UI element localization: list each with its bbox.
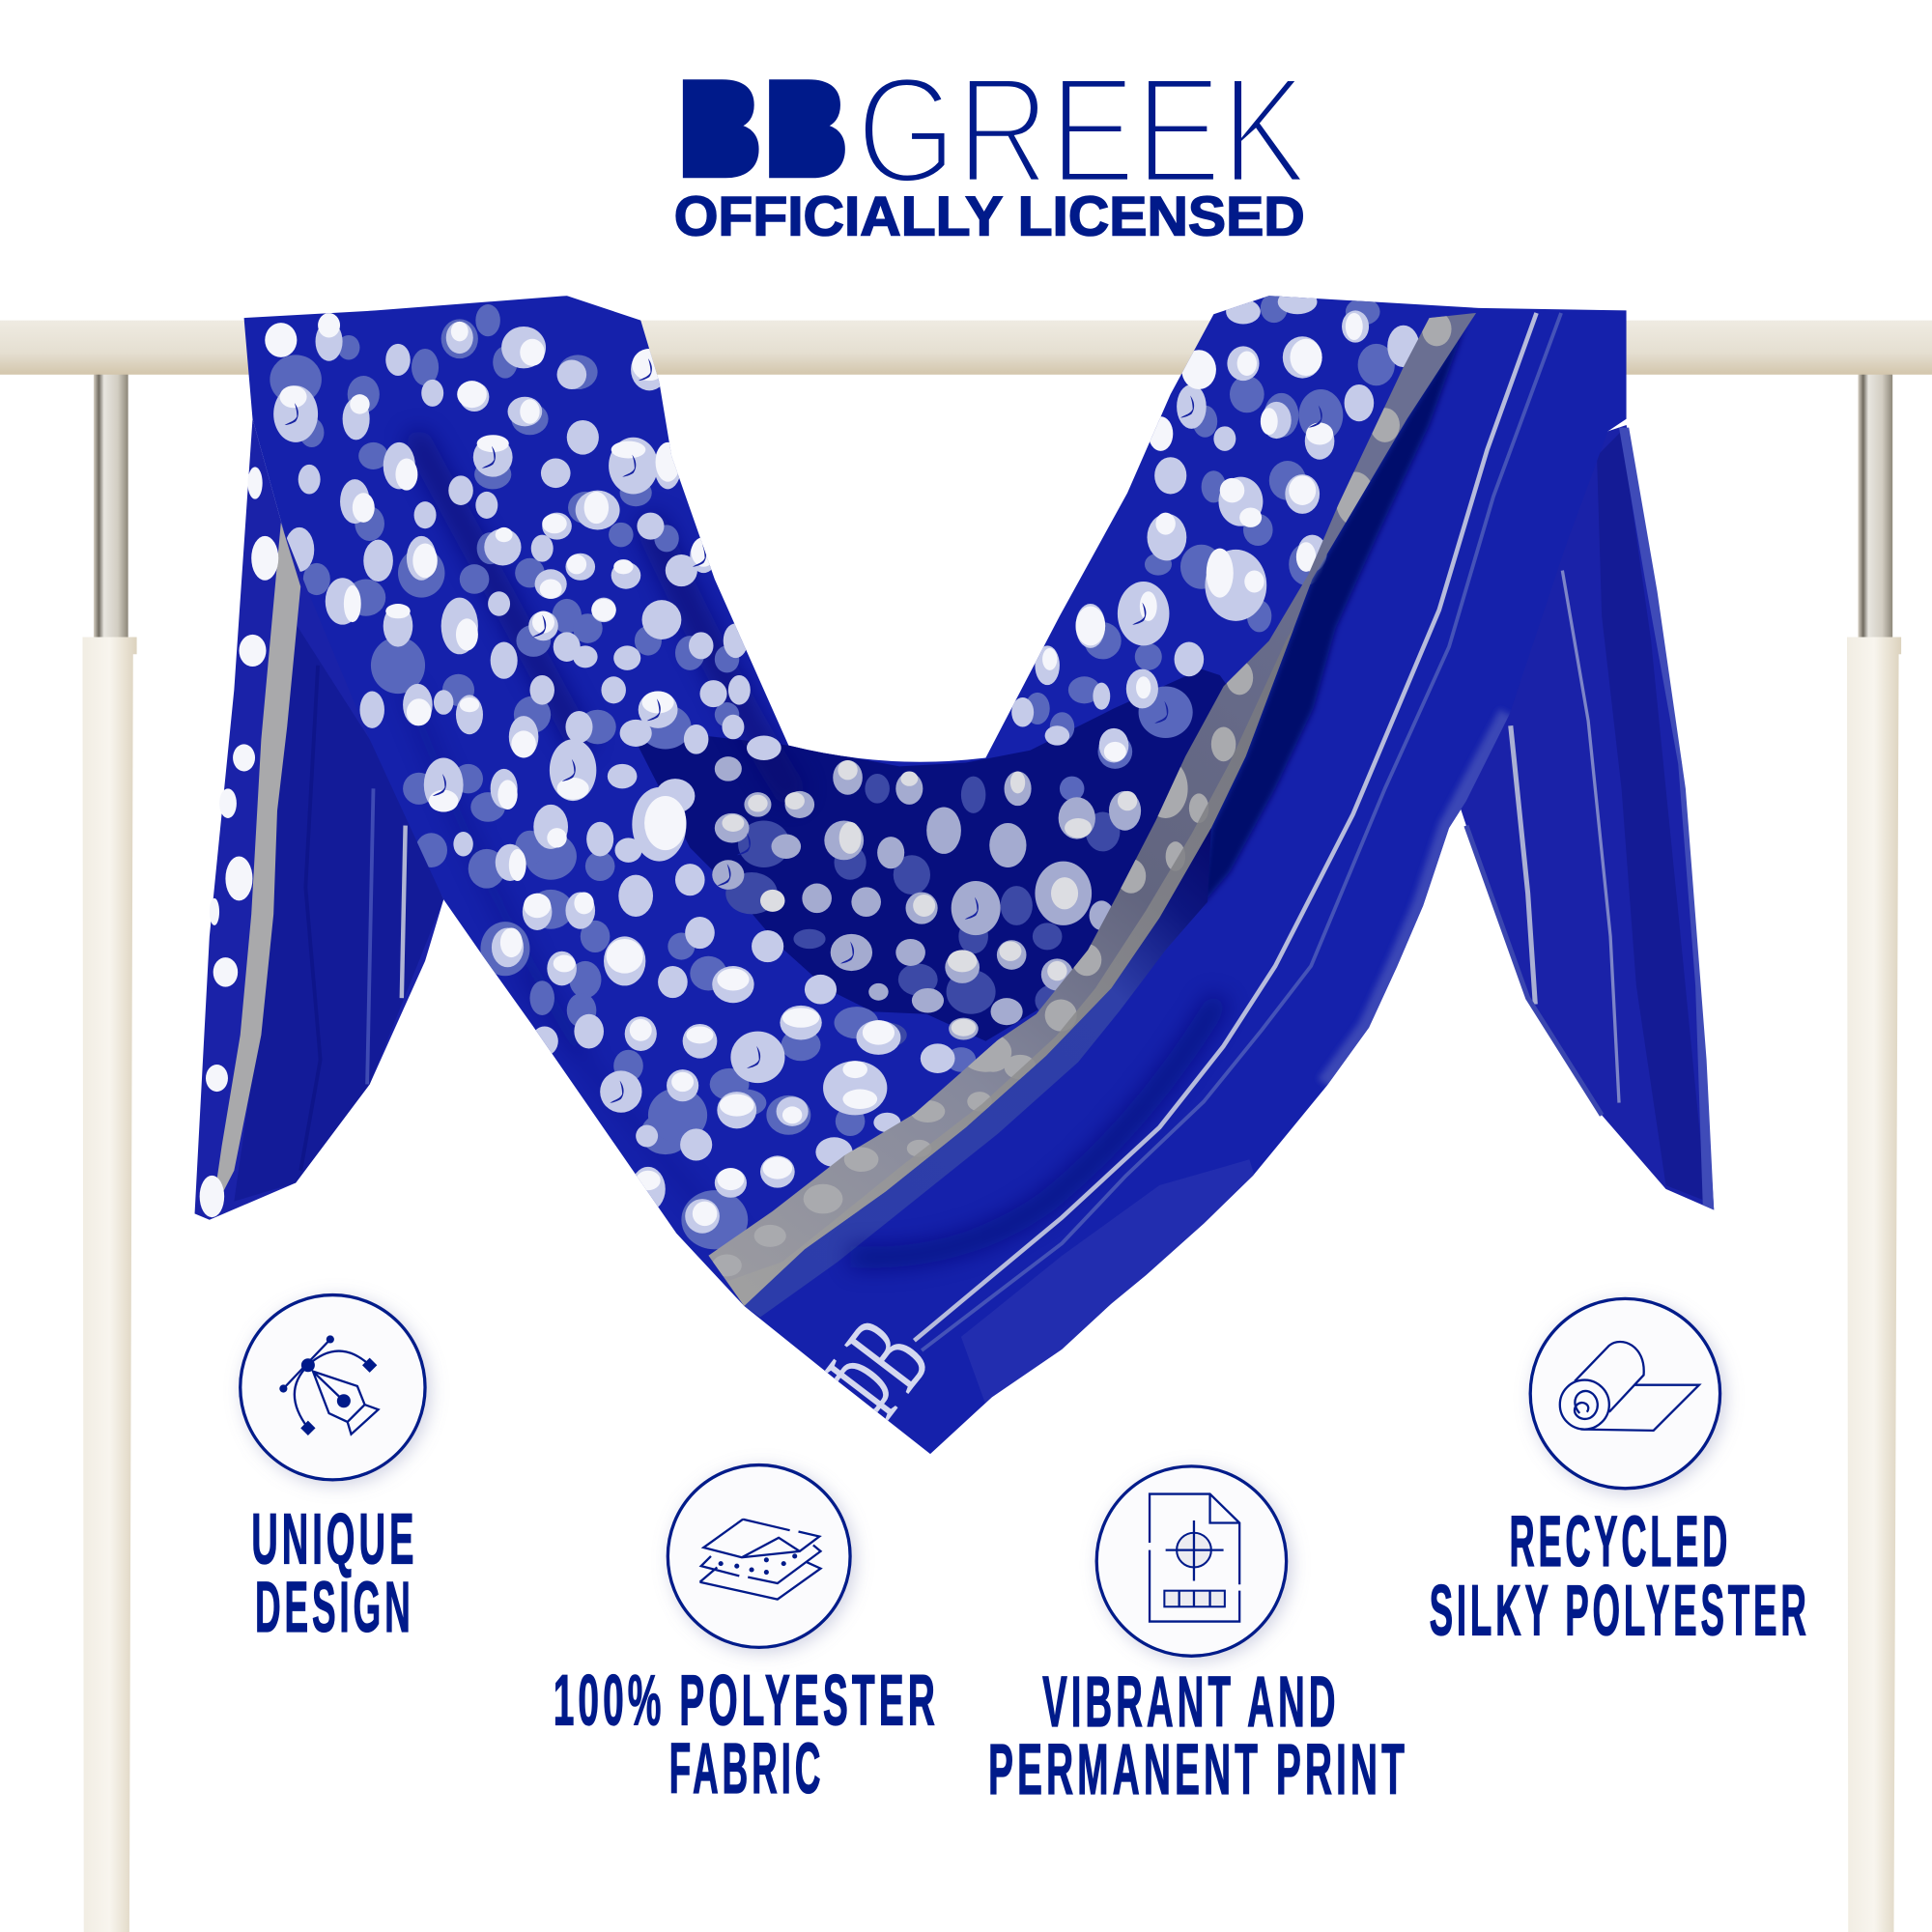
label: recycled silky polyester [1430, 1501, 1810, 1651]
label: vibrant and permanent print: PERMANENT PRINT [988, 1729, 1408, 1809]
grey stripe on left tail [212, 523, 300, 1213]
lighter blue border band [744, 828, 1211, 1318]
fabric fold shadows [401, 426, 789, 1061]
base fabric [243, 296, 1627, 1454]
horizontal rail [0, 321, 1932, 375]
left white post [82, 637, 137, 1932]
label: 100% polyester fabric: 100% POLYESTER [554, 1661, 939, 1741]
corner monogram: ΦB [791, 1294, 954, 1449]
logo wordmark BB: BB [676, 52, 849, 206]
label: vibrant and permanent print [988, 1662, 1408, 1809]
logo wordmark GREEK: GREEK [856, 46, 1307, 215]
feature: vibrant and permanent print [988, 1466, 1408, 1809]
feature: recycled silky polyester [1430, 1298, 1810, 1651]
officially licensed: OFFICIALLY LICENSED [674, 186, 1305, 248]
scarf front body [243, 296, 1627, 1454]
icon: print file [1096, 1466, 1287, 1656]
white dots on left tail [200, 467, 278, 1217]
polka dots: dark zone mid tone [725, 774, 1120, 1047]
right metal post [1858, 370, 1892, 640]
left metal post [94, 370, 128, 640]
polka dots: mid tone [270, 294, 1395, 1249]
lighter grey stripe [727, 629, 1293, 1306]
label: 100% polyester fabric [554, 1661, 939, 1808]
grey border band [708, 313, 1476, 1306]
shaded inner fold [629, 669, 1233, 1041]
polka dots: white highlights [265, 313, 1363, 1226]
sheer lighter corner fabric [961, 1159, 1257, 1405]
icon: fabric layers [668, 1465, 850, 1647]
logo [674, 46, 1307, 248]
icon: fabric roll [1530, 1298, 1720, 1489]
polka dots: light tone [273, 290, 1419, 1234]
label: vibrant and permanent print: VIBRANT AND [1042, 1662, 1339, 1742]
scarf back right tail [1454, 425, 1714, 1210]
scarf back left tail [195, 419, 443, 1220]
sheer lighter edge [1327, 715, 1509, 1086]
label: unique design: DESIGN [255, 1567, 414, 1647]
feature: unique design [241, 1295, 425, 1647]
dark wedge shadow [1202, 323, 1466, 905]
polka dots: dark zone highlights [722, 760, 1137, 1037]
icon: pen tool [241, 1295, 425, 1480]
polka dots: dark zone light tone [712, 756, 1141, 1040]
bird emblems on dots [285, 358, 1322, 1103]
feature: 100% polyester fabric [554, 1465, 939, 1808]
label: unique design: UNIQUE [251, 1499, 417, 1579]
right white post [1847, 637, 1901, 1932]
corner shadow [850, 998, 1220, 1258]
stripe blue [922, 313, 1561, 1350]
label: unique design [251, 1499, 417, 1647]
scarf [185, 246, 1725, 1479]
stripe grey [914, 313, 1537, 1341]
dots showing through grey band [712, 312, 1452, 1276]
label: 100% polyester fabric: FABRIC [669, 1728, 824, 1808]
